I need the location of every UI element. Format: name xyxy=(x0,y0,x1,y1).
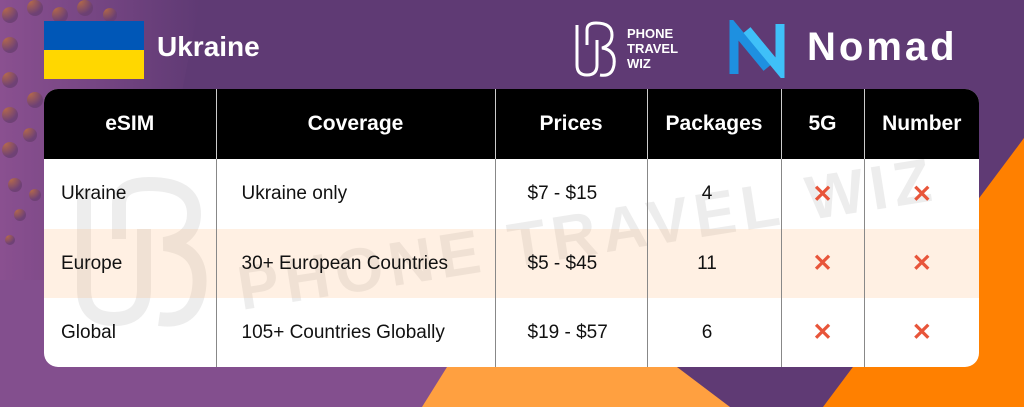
icon: Ukraine flag xyxy=(44,21,144,79)
row: Europe: ✕ xyxy=(912,250,932,277)
row: Global: ✕ xyxy=(912,319,932,346)
header row: eSIM xyxy=(105,112,154,135)
logo: Phone Travel Wiz: PHONE xyxy=(627,26,673,41)
row: Ukraine: ✕ xyxy=(912,180,932,208)
title: Ukraine xyxy=(157,31,260,62)
row: Europe: 11 xyxy=(697,252,717,274)
row: Europe xyxy=(61,250,932,277)
row: Global xyxy=(61,319,932,346)
header row: Number xyxy=(882,112,961,135)
row: Europe: 30+ European Countries xyxy=(242,252,448,274)
logo: Nomad: Nomad xyxy=(807,25,958,69)
logo: Phone Travel Wiz xyxy=(576,22,678,77)
row: Europe: $5 - $45 xyxy=(528,252,597,274)
row: Ukraine: 4 xyxy=(702,183,712,204)
row: Ukraine: $7 - $15 xyxy=(528,183,597,204)
watermark: PHONE TRAVEL WIZ xyxy=(233,145,942,324)
header row: Prices xyxy=(539,112,603,135)
table panel xyxy=(44,89,979,367)
header row: Coverage xyxy=(308,112,403,135)
row: Global: ✕ xyxy=(812,319,833,346)
logo: Phone Travel Wiz: TRAVEL xyxy=(627,41,678,56)
header row: Packages xyxy=(666,112,762,135)
row: Global: 6 xyxy=(702,322,712,342)
logo: Nomad xyxy=(730,20,958,78)
row: Ukraine: Ukraine xyxy=(61,183,126,204)
row: Ukraine xyxy=(61,180,932,208)
row: Europe: ✕ xyxy=(812,250,833,277)
row: Europe: Europe xyxy=(61,252,122,274)
highlighted row background xyxy=(44,229,979,298)
row: Global: Global xyxy=(61,322,116,342)
row: Global: $19 - $57 xyxy=(528,322,608,342)
header row: 5G xyxy=(808,112,836,135)
row: Ukraine: ✕ xyxy=(812,180,833,208)
logo: Phone Travel Wiz: WIZ xyxy=(627,56,651,71)
row: Global: 105+ Countries Globally xyxy=(242,322,445,342)
row: Ukraine: Ukraine only xyxy=(242,183,347,204)
header row xyxy=(44,89,979,346)
